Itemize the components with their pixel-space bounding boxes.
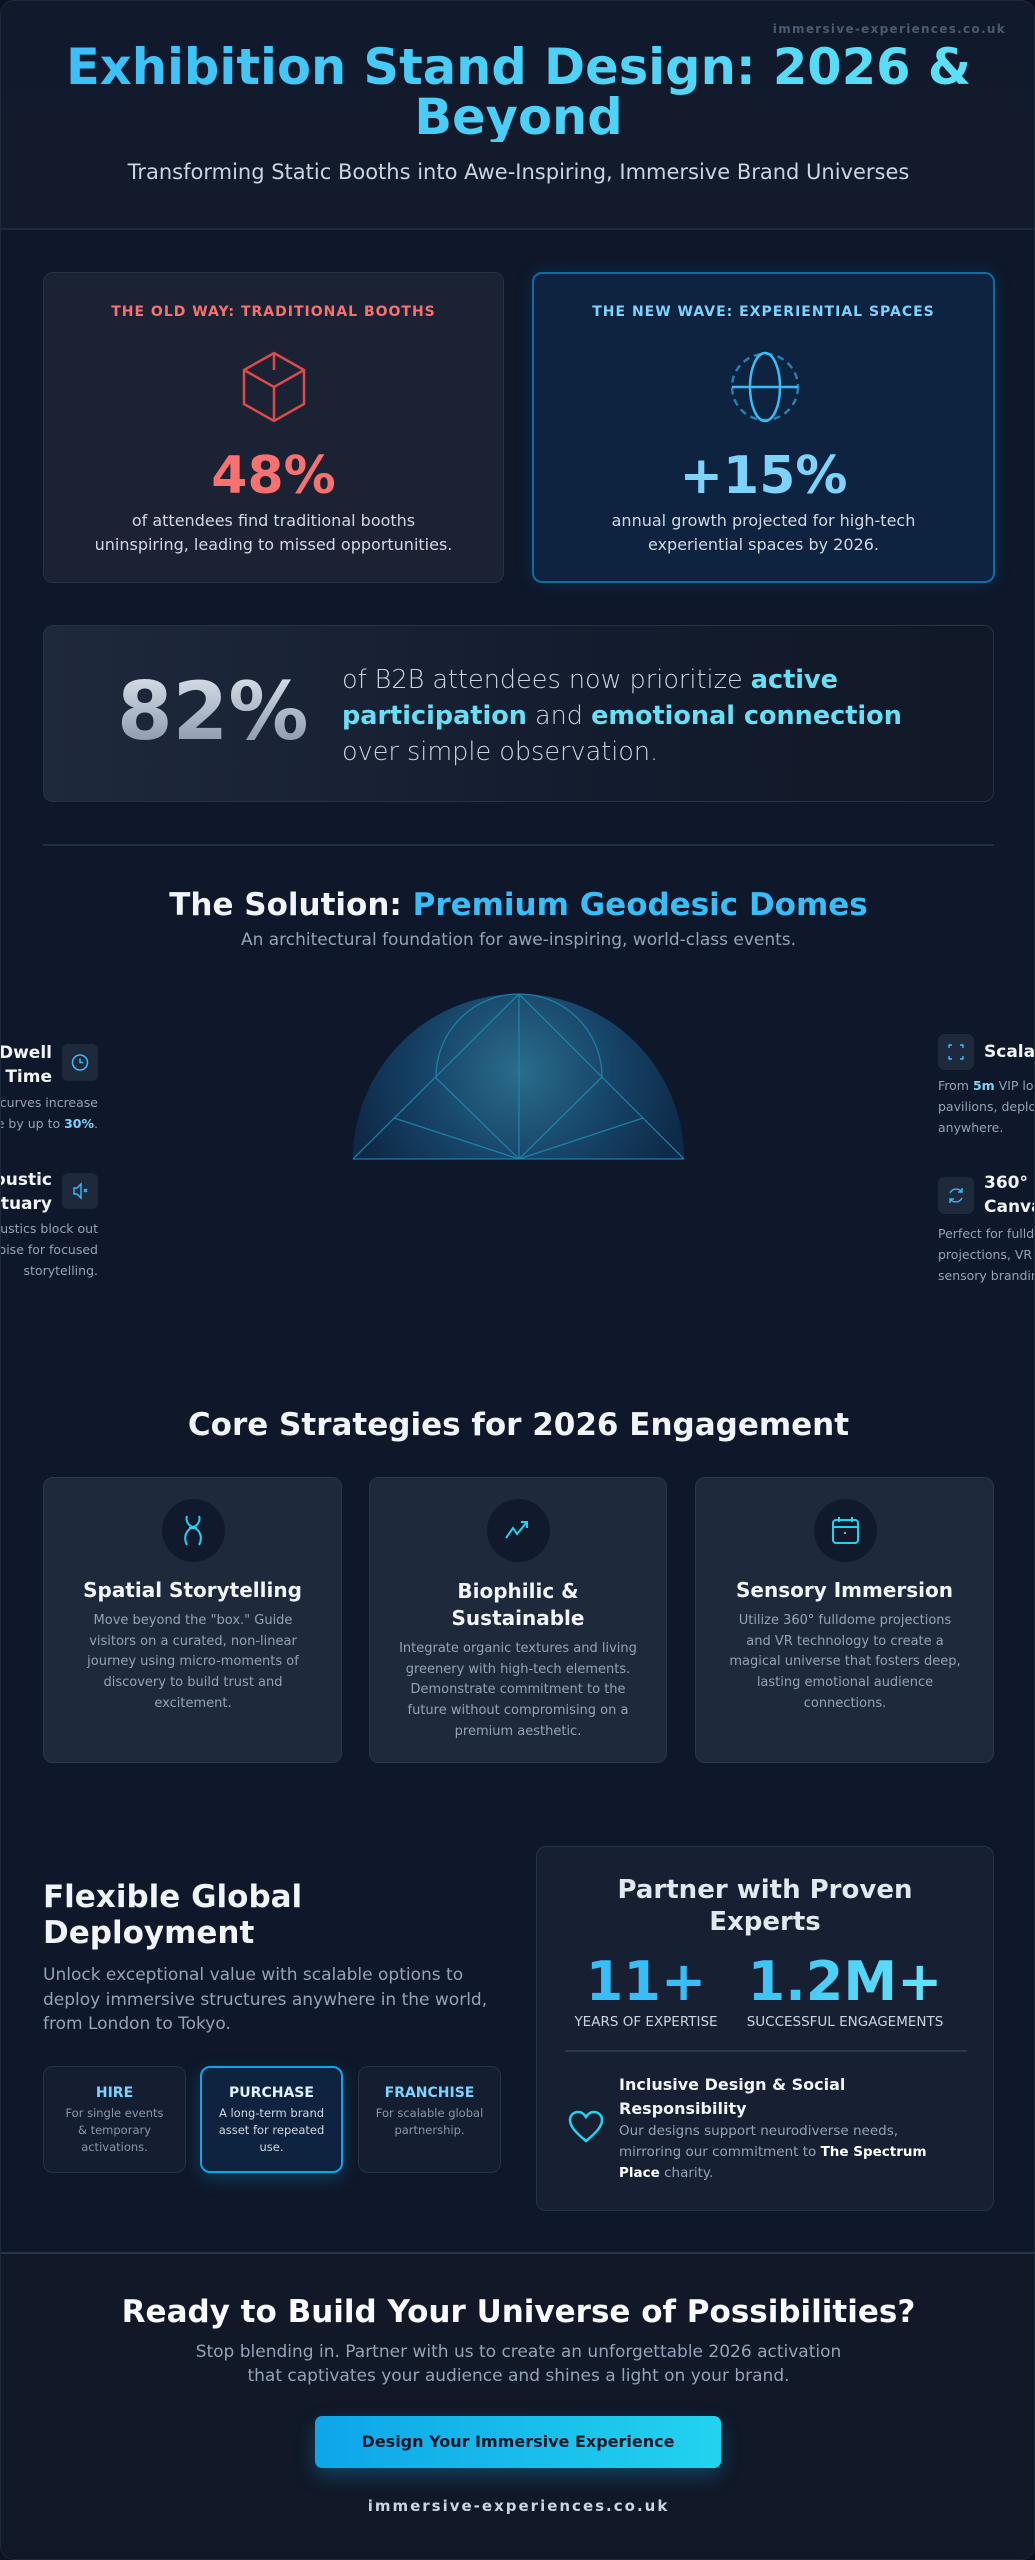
feature: acoustic sanctuary [0, 1170, 98, 1278]
icon: clock [62, 1044, 98, 1081]
title: Exhibition Stand Design: 2026 & [66, 38, 971, 96]
CTA text: that captivates your audience and shines a light on your brand. [247, 2366, 790, 2386]
old way text [95, 511, 452, 554]
title: Sensory Immersion [736, 1578, 953, 1602]
old way text: uninspiring, leading to missed opportunities. [95, 535, 452, 554]
deployment section [43, 1879, 487, 2034]
option: purchase [200, 2066, 343, 2173]
option: purchase: use. [259, 2140, 284, 2154]
panel: 82% stat [43, 625, 994, 802]
strategies heading: Core Strategies for 2026 Engagement [188, 1407, 849, 1443]
option: purchase: PURCHASE [229, 2085, 314, 2101]
new wave text: annual growth projected for high-tech [612, 511, 915, 530]
CTA button [315, 2416, 721, 2468]
deployment text: Unlock exceptional value with scalable options to [43, 1965, 463, 1985]
text: Move beyond the "box." Guide visitors on a curated, non-linear journey using micro-moments of discovery to build trust and excitement. [87, 1613, 299, 1711]
new wave text [612, 511, 915, 554]
inclusive text: mirroring our commitment to The Spectrum [619, 2144, 927, 2160]
scalable text [938, 1078, 1035, 1135]
inclusive title: Responsibility [619, 2099, 747, 2118]
dwell title: Time [5, 1067, 52, 1087]
option: hire: HIRE [96, 2085, 133, 2101]
panel: partner [536, 1846, 994, 2211]
icon: globe [730, 352, 800, 422]
CTA button: Design Your Immersive Experience [362, 2432, 674, 2451]
panel: sensory immersion [695, 1477, 994, 1763]
panel: biophilic [369, 1477, 667, 1763]
stat: engagements: 1.2M+ [748, 1950, 942, 2013]
panel: old way [43, 272, 504, 583]
acoustic title [0, 1170, 52, 1214]
icon: refresh [938, 1177, 974, 1214]
title [1, 42, 1035, 142]
title: Beyond [414, 88, 623, 146]
panel: new wave [532, 272, 995, 583]
360 title [984, 1173, 1035, 1217]
option: franchise: For scalable global [376, 2106, 483, 2120]
deployment title [43, 1879, 302, 1951]
text: Utilize 360° fulldome projections [739, 1613, 951, 1628]
subtitle: Transforming Static Booths into Awe-Inspiring, Immersive Brand Universes [128, 160, 909, 184]
CTA text [196, 2342, 841, 2386]
360 text [938, 1226, 1035, 1283]
deployment text: deploy immersive structures anywhere in the world, [43, 1990, 487, 2010]
stat: years: YEARS OF EXPERTISE [574, 2014, 718, 2030]
header [1, 1, 1035, 230]
82% text: participation and emotional connection [342, 701, 902, 731]
inclusive text [619, 2123, 927, 2181]
feature: dwell time [0, 1043, 98, 1131]
dwell text [0, 1095, 98, 1131]
title [452, 1579, 584, 1630]
big number 82%: 82% [117, 665, 308, 758]
82% text: over simple observation. [342, 737, 658, 767]
option: hire: & temporary [78, 2123, 151, 2137]
82% text [342, 665, 902, 767]
old way label: THE OLD WAY: TRADITIONAL BOOTHS [111, 304, 436, 320]
acoustic text [0, 1221, 98, 1278]
old way text: of attendees find traditional booths [132, 511, 415, 530]
solution heading: The Solution: Premium Geodesic Domes [169, 887, 868, 923]
stat: years: 11+ [586, 1950, 706, 2013]
stat: engagements: SUCCESSFUL ENGAGEMENTS [747, 2014, 943, 2030]
inclusive title [619, 2075, 845, 2118]
CTA text: Stop blending in. Partner with us to create an unforgettable 2026 activation [196, 2342, 841, 2362]
stat +15%: +15% [679, 446, 848, 506]
partner title: Experts [709, 1907, 821, 1937]
new wave text: experiential spaces by 2026. [648, 535, 879, 554]
stat: years [574, 1950, 718, 2030]
icon: cube [242, 352, 306, 422]
feature: scalable [938, 1034, 1035, 1135]
inclusive text: Our designs support neurodiverse needs, [619, 2123, 898, 2139]
option: hire [43, 2066, 186, 2173]
deployment title: Deployment [43, 1915, 254, 1951]
inclusive title: Inclusive Design & Social [619, 2075, 845, 2094]
82% text: of B2B attendees now prioritize active [342, 665, 838, 695]
acoustic text: storytelling. [24, 1263, 98, 1278]
title: Biophilic & [457, 1579, 579, 1603]
new wave label: THE NEW WAVE: EXPERIENTIAL SPACES [592, 304, 935, 320]
scalable text: anywhere. [938, 1120, 1003, 1135]
partner title [618, 1875, 912, 1937]
icon: heart [568, 2110, 604, 2142]
deployment text: from London to Tokyo. [43, 2014, 231, 2034]
icon: mute speaker [62, 1173, 98, 1209]
icon: calendar [814, 1499, 877, 1562]
text: and VR technology to create a magical universe that fosters deep, lasting emotional audience connections. [729, 1634, 961, 1711]
option: hire: For single events [65, 2106, 164, 2120]
CTA section [1, 2252, 1035, 2560]
option: hire: activations. [81, 2140, 148, 2154]
icon: trend [487, 1499, 550, 1562]
CTA heading: Ready to Build Your Universe of Possibilities? [122, 2294, 915, 2330]
footer domain: immersive-experiences.co.uk [368, 2497, 669, 2515]
option: purchase: asset for repeated [219, 2123, 324, 2137]
icon: expand [938, 1034, 974, 1070]
dwell title [0, 1043, 52, 1087]
title: Spatial Storytelling [83, 1578, 302, 1602]
panel: spatial storytelling [43, 1477, 342, 1763]
solution subtitle: An architectural foundation for awe-inspiring, world-class events. [241, 930, 796, 950]
stat 48%: 48% [211, 446, 336, 506]
partner title: Partner with Proven [618, 1875, 912, 1905]
title: Sustainable [452, 1606, 584, 1630]
deployment title: Flexible Global [43, 1879, 302, 1915]
inclusive text: Place charity. [619, 2165, 713, 2181]
option: franchise [358, 2066, 501, 2173]
deployment text [43, 1965, 487, 2034]
domain label: immersive-experiences.co.uk [773, 22, 1006, 36]
icon: storytelling [162, 1499, 225, 1562]
dome illustration [352, 993, 684, 1160]
option: franchise: partnership. [394, 2123, 465, 2137]
option: franchise: FRANCHISE [385, 2085, 474, 2101]
text: Integrate organic textures and living greenery with high-tech elements. Demonstrate commitment to the future without compromising on a premium aesthetic. [399, 1641, 637, 1739]
feature: 360 canvas [938, 1173, 1035, 1283]
option: purchase: A long-term brand [219, 2106, 324, 2120]
